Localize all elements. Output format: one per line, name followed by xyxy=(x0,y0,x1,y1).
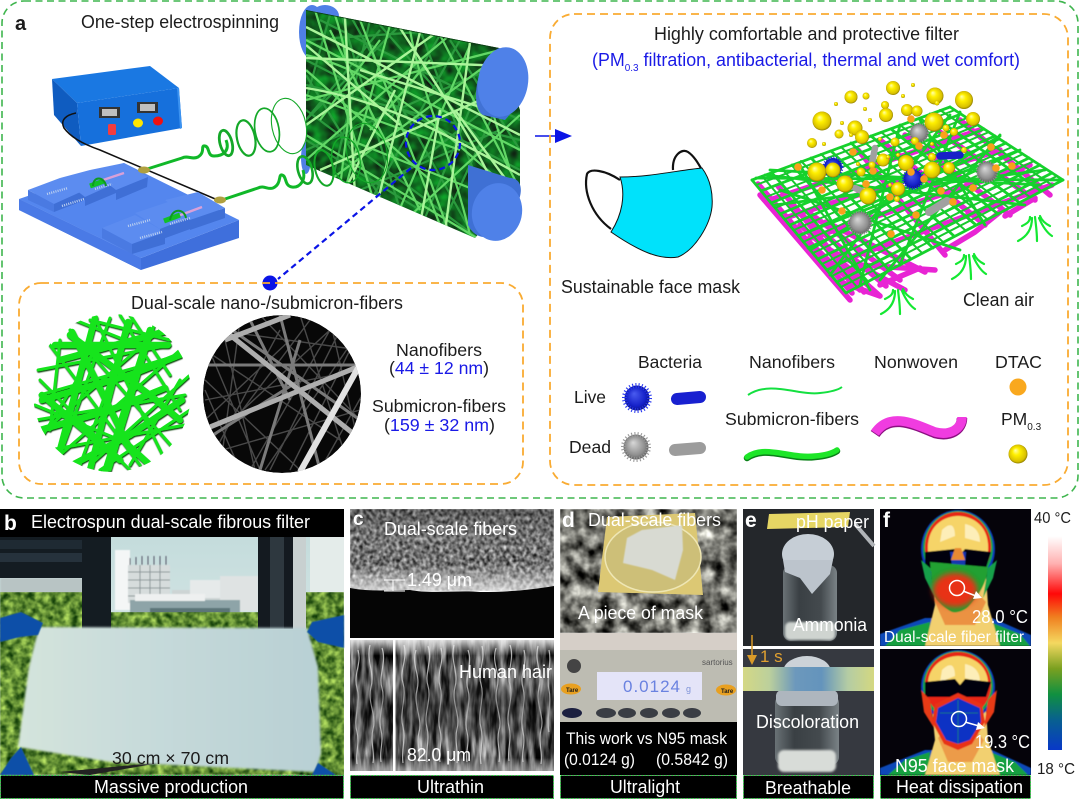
nanofiber green mesh xyxy=(752,107,1063,293)
SEM: dual-scale fibers xyxy=(350,509,554,640)
electrospinning jet lower xyxy=(222,119,393,200)
panel f: heat dissipation xyxy=(880,509,1075,798)
SEM: human hair: Human hair xyxy=(459,662,552,682)
thermal image: N95 mask: N95 face mask xyxy=(895,756,1015,776)
nonwoven magenta fibers xyxy=(758,120,1052,300)
caption d xyxy=(560,776,736,798)
photo: mask piece on balance: Tare xyxy=(566,688,579,694)
header b: b xyxy=(4,512,17,535)
caption c xyxy=(350,776,554,798)
needle tips xyxy=(138,166,226,204)
illustration: filter with captured particles xyxy=(752,81,1063,314)
legend: PM0.3: 0.3 xyxy=(1027,422,1042,433)
legend: DTAC xyxy=(995,352,1042,396)
legend: nonwoven xyxy=(874,352,962,434)
legend: PM0.3: PM xyxy=(1001,409,1027,429)
legend: bacteria: Bacteria xyxy=(638,352,702,372)
panel e: breathable xyxy=(743,509,874,798)
thermal image: N95 mask: 19.3 °C xyxy=(975,732,1030,752)
photo: jar with ammonia: Ammonia xyxy=(793,615,868,635)
legend: bacteria: Live xyxy=(574,387,606,407)
caption b xyxy=(0,776,344,798)
legend: DTAC: DTAC xyxy=(995,352,1042,372)
live bacteria xyxy=(824,158,922,188)
photo: discoloured pH strip xyxy=(743,635,874,775)
photo: mask piece on balance: Tare xyxy=(721,689,734,695)
thermal image: dual-scale filter: f xyxy=(883,509,891,532)
subheading: functions: (PM xyxy=(592,50,625,70)
subheading: functions: 0.3 xyxy=(625,63,639,74)
photo: sheet held at window xyxy=(0,537,344,775)
legend: bacteria: Dead xyxy=(569,437,611,457)
label: sustainable face mask: Sustainable face mask xyxy=(561,277,741,297)
thermal image: N95 mask xyxy=(880,649,1031,776)
gloves xyxy=(0,612,344,775)
heading: dual-scale fibers: Dual-scale nano-/submicron-fibers xyxy=(131,293,403,313)
syringes xyxy=(90,173,202,221)
panel a: fabrication and structure xyxy=(2,0,1078,498)
springs xyxy=(47,184,190,238)
thermal image: dual-scale filter xyxy=(880,509,1031,646)
panel c: ultrathin xyxy=(350,509,554,798)
DTAC particles xyxy=(794,115,1016,238)
comparison text xyxy=(560,722,737,775)
arrow to filter xyxy=(535,129,572,143)
legend xyxy=(569,352,1042,464)
caption e xyxy=(744,776,874,798)
nanofibers diameter: (44 ± 12 nm) xyxy=(389,358,489,378)
panel b: massive production xyxy=(0,509,344,798)
temperature colour bar: 18 °C xyxy=(1037,761,1075,778)
comparison text: (0.5842 g) xyxy=(656,751,728,769)
heading: protective filter: Highly comfortable and protective filter xyxy=(654,24,959,44)
comparison text: This work vs N95 mask xyxy=(566,730,728,748)
legend: nanofibers xyxy=(748,352,842,395)
label: sheet size: 30 cm × 70 cm xyxy=(112,748,229,768)
power supply xyxy=(52,66,182,146)
power cable xyxy=(63,113,220,201)
photo: mask piece on balance: 0.0124 xyxy=(623,677,681,696)
nanofibers diameter xyxy=(389,340,489,378)
trees xyxy=(110,612,260,632)
photo: discoloured pH strip: Discoloration xyxy=(756,712,859,732)
front rollers xyxy=(467,43,534,246)
dead bacteria xyxy=(849,124,997,234)
photo: mask piece on balance: g xyxy=(686,684,691,694)
window frame xyxy=(0,537,306,629)
SEM: dual-scale fibers: 1.49 μm xyxy=(407,570,472,590)
panel label a: a xyxy=(15,13,27,35)
spinning stage with spinnerets xyxy=(19,163,239,270)
caption b: Massive production xyxy=(94,777,248,797)
buildings xyxy=(115,550,258,618)
wisp: clean air xyxy=(881,289,915,314)
thermal image: dual-scale filter: Dual-scale fiber filter xyxy=(884,629,1025,646)
callout: magnified fiber region xyxy=(278,116,460,279)
panel: dual-scale fibers xyxy=(19,283,523,484)
icon: face mask xyxy=(586,151,712,258)
submicron diameter xyxy=(372,396,506,435)
legend: nonwoven: Nonwoven xyxy=(874,352,958,372)
SEM: human hair: 82.0 μm xyxy=(407,745,471,765)
legend: nanofibers: Nanofibers xyxy=(749,352,835,372)
caption f: Heat dissipation xyxy=(896,777,1023,797)
temperature colour bar: 40 °C xyxy=(1034,510,1071,527)
wisp: clean air xyxy=(1018,216,1052,241)
photo: mask piece on balance: A piece of mask xyxy=(578,603,704,623)
header b: Electrospun dual-scale fibrous filter xyxy=(31,512,310,532)
submicron diameter: (159 ± 32 nm) xyxy=(384,415,495,435)
legend: submicron fibers xyxy=(725,409,859,458)
caption c: Ultrathin xyxy=(417,777,484,797)
stage blocks xyxy=(28,163,225,254)
caption e: Breathable xyxy=(765,778,851,798)
photo: discoloured pH strip: 1 s xyxy=(760,647,783,666)
PM0.3 particles xyxy=(807,81,980,204)
legend: bacteria xyxy=(569,352,702,460)
caption d: Ultralight xyxy=(610,777,680,797)
label: clean air: Clean air xyxy=(963,290,1034,310)
panel d: ultralight xyxy=(560,509,737,798)
subheading: functions: filtration, antibacterial, thermal and wet comfort) xyxy=(639,50,1020,70)
photo: jar with ammonia: pH paper xyxy=(796,512,869,532)
submicron diameter: Submicron-fibers xyxy=(372,396,506,416)
filter sheet xyxy=(18,627,321,772)
SEM: dual-scale fibers: c xyxy=(353,509,364,530)
photo: mask piece on balance: sartorius xyxy=(702,658,733,667)
photo: jar with ammonia: e xyxy=(745,509,757,532)
panel: protective filter xyxy=(550,14,1068,485)
wisp: clean air xyxy=(952,254,986,279)
SEM: human hair xyxy=(350,640,554,771)
SEM: dual-scale fibers: Dual-scale fibers xyxy=(384,519,517,539)
illustration: green fiber network xyxy=(35,315,190,472)
photo: mask piece on balance: Dual-scale fibers xyxy=(588,510,721,530)
comparison text: (0.0124 g) xyxy=(564,751,635,769)
heading: one-step electrospinning: One-step electrospinning xyxy=(81,12,279,32)
nanofibers diameter: Nanofibers xyxy=(396,340,482,360)
photo: jar with ammonia xyxy=(743,509,874,646)
header b xyxy=(0,509,344,537)
legend: PM0.3 xyxy=(1001,409,1042,464)
legend: submicron fibers: Submicron-fibers xyxy=(725,409,859,429)
collector drum with fiber mat xyxy=(299,0,534,246)
thermal image: dual-scale filter: 28.0 °C xyxy=(972,607,1028,627)
electrospinning jet upper xyxy=(144,95,311,170)
photo: mask piece on balance xyxy=(560,509,737,722)
temperature colour bar xyxy=(1034,510,1075,778)
SEM image: fibers xyxy=(203,315,365,473)
photo: mask piece on balance: d xyxy=(562,509,575,532)
